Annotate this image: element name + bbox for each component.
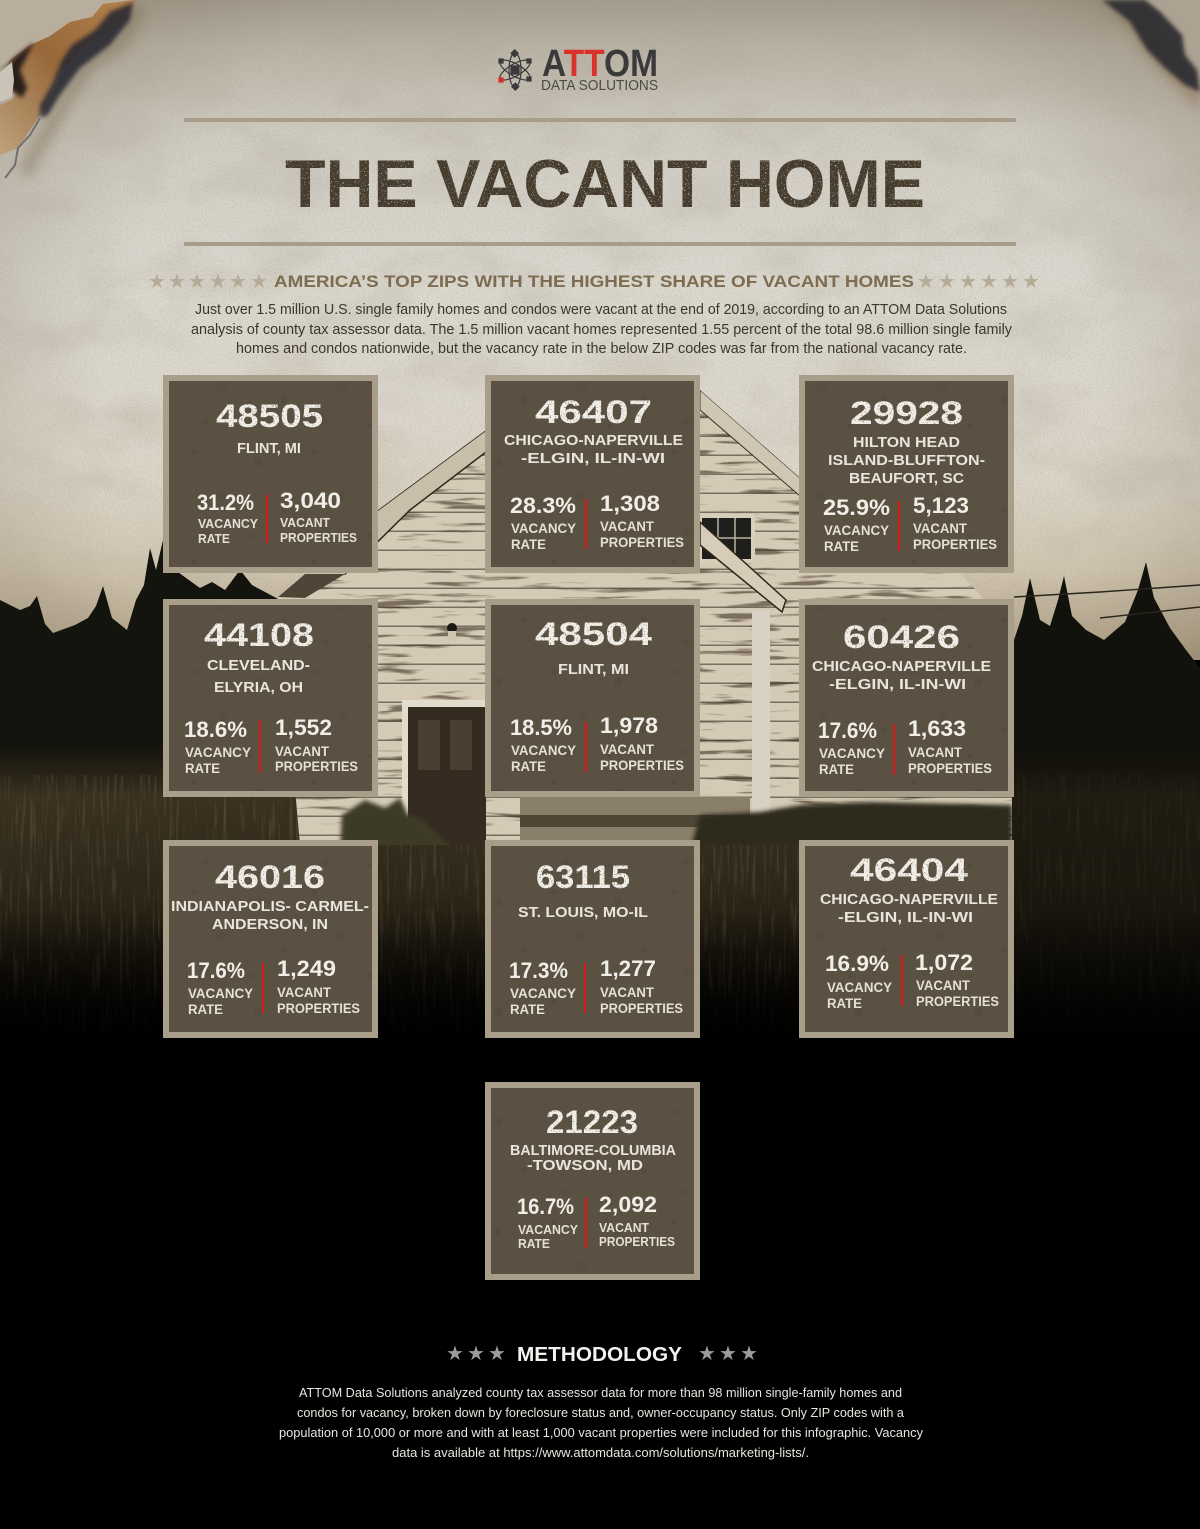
burned corner top right <box>1095 0 1200 110</box>
city: CHICAGO-NAPERVILLE <box>820 892 998 908</box>
stats: 1,978 <box>600 713 658 738</box>
city: FLINT, MI <box>558 662 629 678</box>
intro paragraph <box>191 302 1013 357</box>
stats: VACANT <box>908 745 963 760</box>
low roof <box>278 574 345 598</box>
stats: 1,633 <box>908 716 966 741</box>
card: 48505 <box>163 375 378 573</box>
stats: RATE <box>518 1237 550 1251</box>
card: 46404 <box>799 840 1014 1038</box>
stats: VACANCY <box>824 523 889 538</box>
stats: 18.6% <box>184 717 247 742</box>
streaked lower wall <box>520 797 750 840</box>
stats: 5,123 <box>913 493 969 518</box>
stats <box>517 1192 675 1251</box>
city <box>820 892 998 926</box>
card: 46016 <box>163 840 378 1038</box>
stats: RATE <box>511 759 546 774</box>
zip: 46407 <box>535 394 652 430</box>
stats <box>818 716 992 777</box>
window <box>699 514 755 563</box>
stats <box>823 493 997 554</box>
porch lamp <box>447 623 457 637</box>
city: ISLAND-BLUFFTON- <box>828 453 985 469</box>
stats: PROPERTIES <box>600 535 684 550</box>
stats: VACANCY <box>511 743 576 758</box>
stats: RATE <box>185 761 220 776</box>
card: 29928 <box>799 375 1014 573</box>
house photo <box>278 390 1012 845</box>
city: BEAUFORT, SC <box>849 471 965 487</box>
stats: PROPERTIES <box>600 758 684 773</box>
top rule <box>184 118 1016 122</box>
city <box>812 659 991 693</box>
zip: 21223 <box>546 1104 638 1140</box>
stats: VACANCY <box>510 986 576 1001</box>
logo subline: DATA SOLUTIONS <box>541 77 658 94</box>
card: 60426 <box>799 599 1014 797</box>
stats <box>510 713 684 774</box>
stats <box>184 715 358 776</box>
intro paragraph: analysis of county tax assessor data. The 1.5 million vacant homes represented 1.55 percent of the total 98.6 million single family <box>191 322 1013 338</box>
stars left: ★★★★★★ <box>148 269 268 293</box>
zip: 44108 <box>204 617 314 653</box>
stats: VACANT <box>600 985 655 1000</box>
stats: VACANCY <box>511 521 576 536</box>
stats: VACANCY <box>188 986 253 1001</box>
intro paragraph: homes and condos nationwide, but the vacancy rate in the below ZIP codes was far from the national vacancy rate. <box>236 341 967 357</box>
stats <box>510 491 684 552</box>
city: CLEVELAND- <box>207 658 310 674</box>
city: ELYRIA, OH <box>214 680 303 696</box>
city: -ELGIN, IL-IN-WI <box>838 910 973 926</box>
left gable trim <box>305 430 486 574</box>
intro paragraph: Just over 1.5 million U.S. single family homes and condos were vacant at the end of 2019, according to an ATTOM Data Solutions <box>195 302 1007 318</box>
stats: PROPERTIES <box>600 1001 683 1016</box>
stats: 2,092 <box>599 1192 657 1217</box>
card: 21223 <box>485 1082 700 1280</box>
city: -TOWSON, MD <box>527 1158 643 1174</box>
stats <box>197 488 357 546</box>
stats: PROPERTIES <box>280 531 357 545</box>
stats: VACANT <box>600 742 655 757</box>
stats: 31.2% <box>197 490 254 515</box>
zip: 29928 <box>850 395 963 431</box>
city: ST. LOUIS, MO-IL <box>518 905 648 921</box>
zip: 48504 <box>535 616 652 652</box>
stats: 1,308 <box>600 491 660 516</box>
city: BALTIMORE-COLUMBIA <box>510 1143 677 1159</box>
logo icon <box>497 50 533 90</box>
stats: 1,249 <box>277 956 336 981</box>
city <box>207 658 310 696</box>
stats: 16.9% <box>825 951 889 976</box>
stats: 17.6% <box>818 718 877 743</box>
city: -ELGIN, IL-IN-WI <box>829 677 966 693</box>
stats: PROPERTIES <box>277 1001 360 1016</box>
zip: 60426 <box>843 619 960 655</box>
city: CHICAGO-NAPERVILLE <box>812 659 991 675</box>
stats: VACANT <box>277 985 332 1000</box>
weeds at base of the house <box>340 798 455 850</box>
stats: VACANT <box>916 978 971 993</box>
stats: VACANCY <box>185 745 251 760</box>
right gable trim <box>700 390 800 496</box>
title: THE VACANT HOME <box>285 146 925 222</box>
methodology text: ATTOM Data Solutions analyzed county tax assessor data for more than 98 million single-family homes and <box>299 1385 902 1400</box>
methodology text: condos for vacancy, broken down by foreclosure status and, owner-occupancy status. Only ZIP codes with a <box>297 1405 905 1420</box>
stats: 18.5% <box>510 715 572 740</box>
stats: VACANCY <box>827 980 892 995</box>
card: 44108 <box>163 599 378 797</box>
door <box>402 700 486 845</box>
city <box>510 1143 677 1174</box>
stats: RATE <box>827 996 862 1011</box>
zip: 46404 <box>850 852 968 888</box>
methodology text <box>279 1385 923 1460</box>
stats: VACANT <box>913 521 968 536</box>
stats: VACANCY <box>198 517 259 531</box>
stats <box>187 956 360 1017</box>
methodology text: population of 10,000 or more and with at least 1,000 vacant properties were included for this infographic. Vacancy <box>279 1425 923 1440</box>
stats: 17.6% <box>187 958 245 983</box>
city: -ELGIN, IL-IN-WI <box>521 451 665 467</box>
stats: PROPERTIES <box>913 537 997 552</box>
stats: RATE <box>198 532 230 546</box>
stats: VACANT <box>275 744 330 759</box>
lean-to roof <box>700 522 786 612</box>
stats: PROPERTIES <box>599 1235 675 1249</box>
methodology heading <box>446 1341 758 1366</box>
stats: VACANT <box>600 519 655 534</box>
stats: 1,072 <box>915 950 973 975</box>
stats: VACANCY <box>518 1223 579 1237</box>
stats: 17.3% <box>509 958 568 983</box>
subheading text: AMERICA’S TOP ZIPS WITH THE HIGHEST SHARE OF VACANT HOMES <box>274 272 914 291</box>
zip: 46016 <box>215 859 325 895</box>
stats <box>825 950 999 1011</box>
zip: 63115 <box>536 859 630 895</box>
stats: 3,040 <box>280 488 341 513</box>
stats: VACANT <box>599 1221 649 1235</box>
stats: RATE <box>824 539 859 554</box>
stats: RATE <box>188 1002 223 1017</box>
stats: 28.3% <box>510 493 576 518</box>
stats: 25.9% <box>823 495 890 520</box>
card: 48504 <box>485 599 700 797</box>
stats: PROPERTIES <box>916 994 999 1009</box>
stars right: ★★★ <box>698 1341 758 1365</box>
city: INDIANAPOLIS- CARMEL- <box>171 899 369 915</box>
stats: VACANCY <box>819 746 885 761</box>
stars left: ★★★ <box>446 1341 506 1365</box>
stats: RATE <box>819 762 854 777</box>
subheading with stars <box>148 269 1040 293</box>
stats <box>509 956 683 1017</box>
porch post <box>752 610 770 812</box>
city <box>504 433 683 467</box>
city <box>828 435 985 487</box>
logo <box>497 43 658 94</box>
city: HILTON HEAD <box>853 435 960 451</box>
stats: 1,552 <box>275 715 332 740</box>
city: CHICAGO-NAPERVILLE <box>504 433 683 449</box>
methodology text: data is available at https://www.attomdata.com/solutions/marketing-lists/. <box>392 1445 809 1460</box>
stats: VACANT <box>280 516 330 530</box>
logo wordmark: ATTOM <box>542 43 658 85</box>
bottom rule <box>184 242 1016 246</box>
stats: 16.7% <box>517 1194 574 1219</box>
heading text: METHODOLOGY <box>517 1344 683 1366</box>
city: FLINT, MI <box>237 441 301 457</box>
city <box>171 899 369 933</box>
burned corner top left <box>0 0 140 178</box>
stats: RATE <box>510 1002 545 1017</box>
stats: 1,277 <box>600 956 656 981</box>
card: 46407 <box>485 375 700 573</box>
distant tree line and grass field <box>0 540 1200 1045</box>
stats: PROPERTIES <box>275 759 358 774</box>
stats: RATE <box>511 537 546 552</box>
city: ANDERSON, IN <box>212 917 328 933</box>
stats: PROPERTIES <box>908 761 992 776</box>
stars right: ★★★★★★ <box>917 269 1040 293</box>
card: 63115 <box>485 840 700 1038</box>
zip: 48505 <box>216 398 323 434</box>
